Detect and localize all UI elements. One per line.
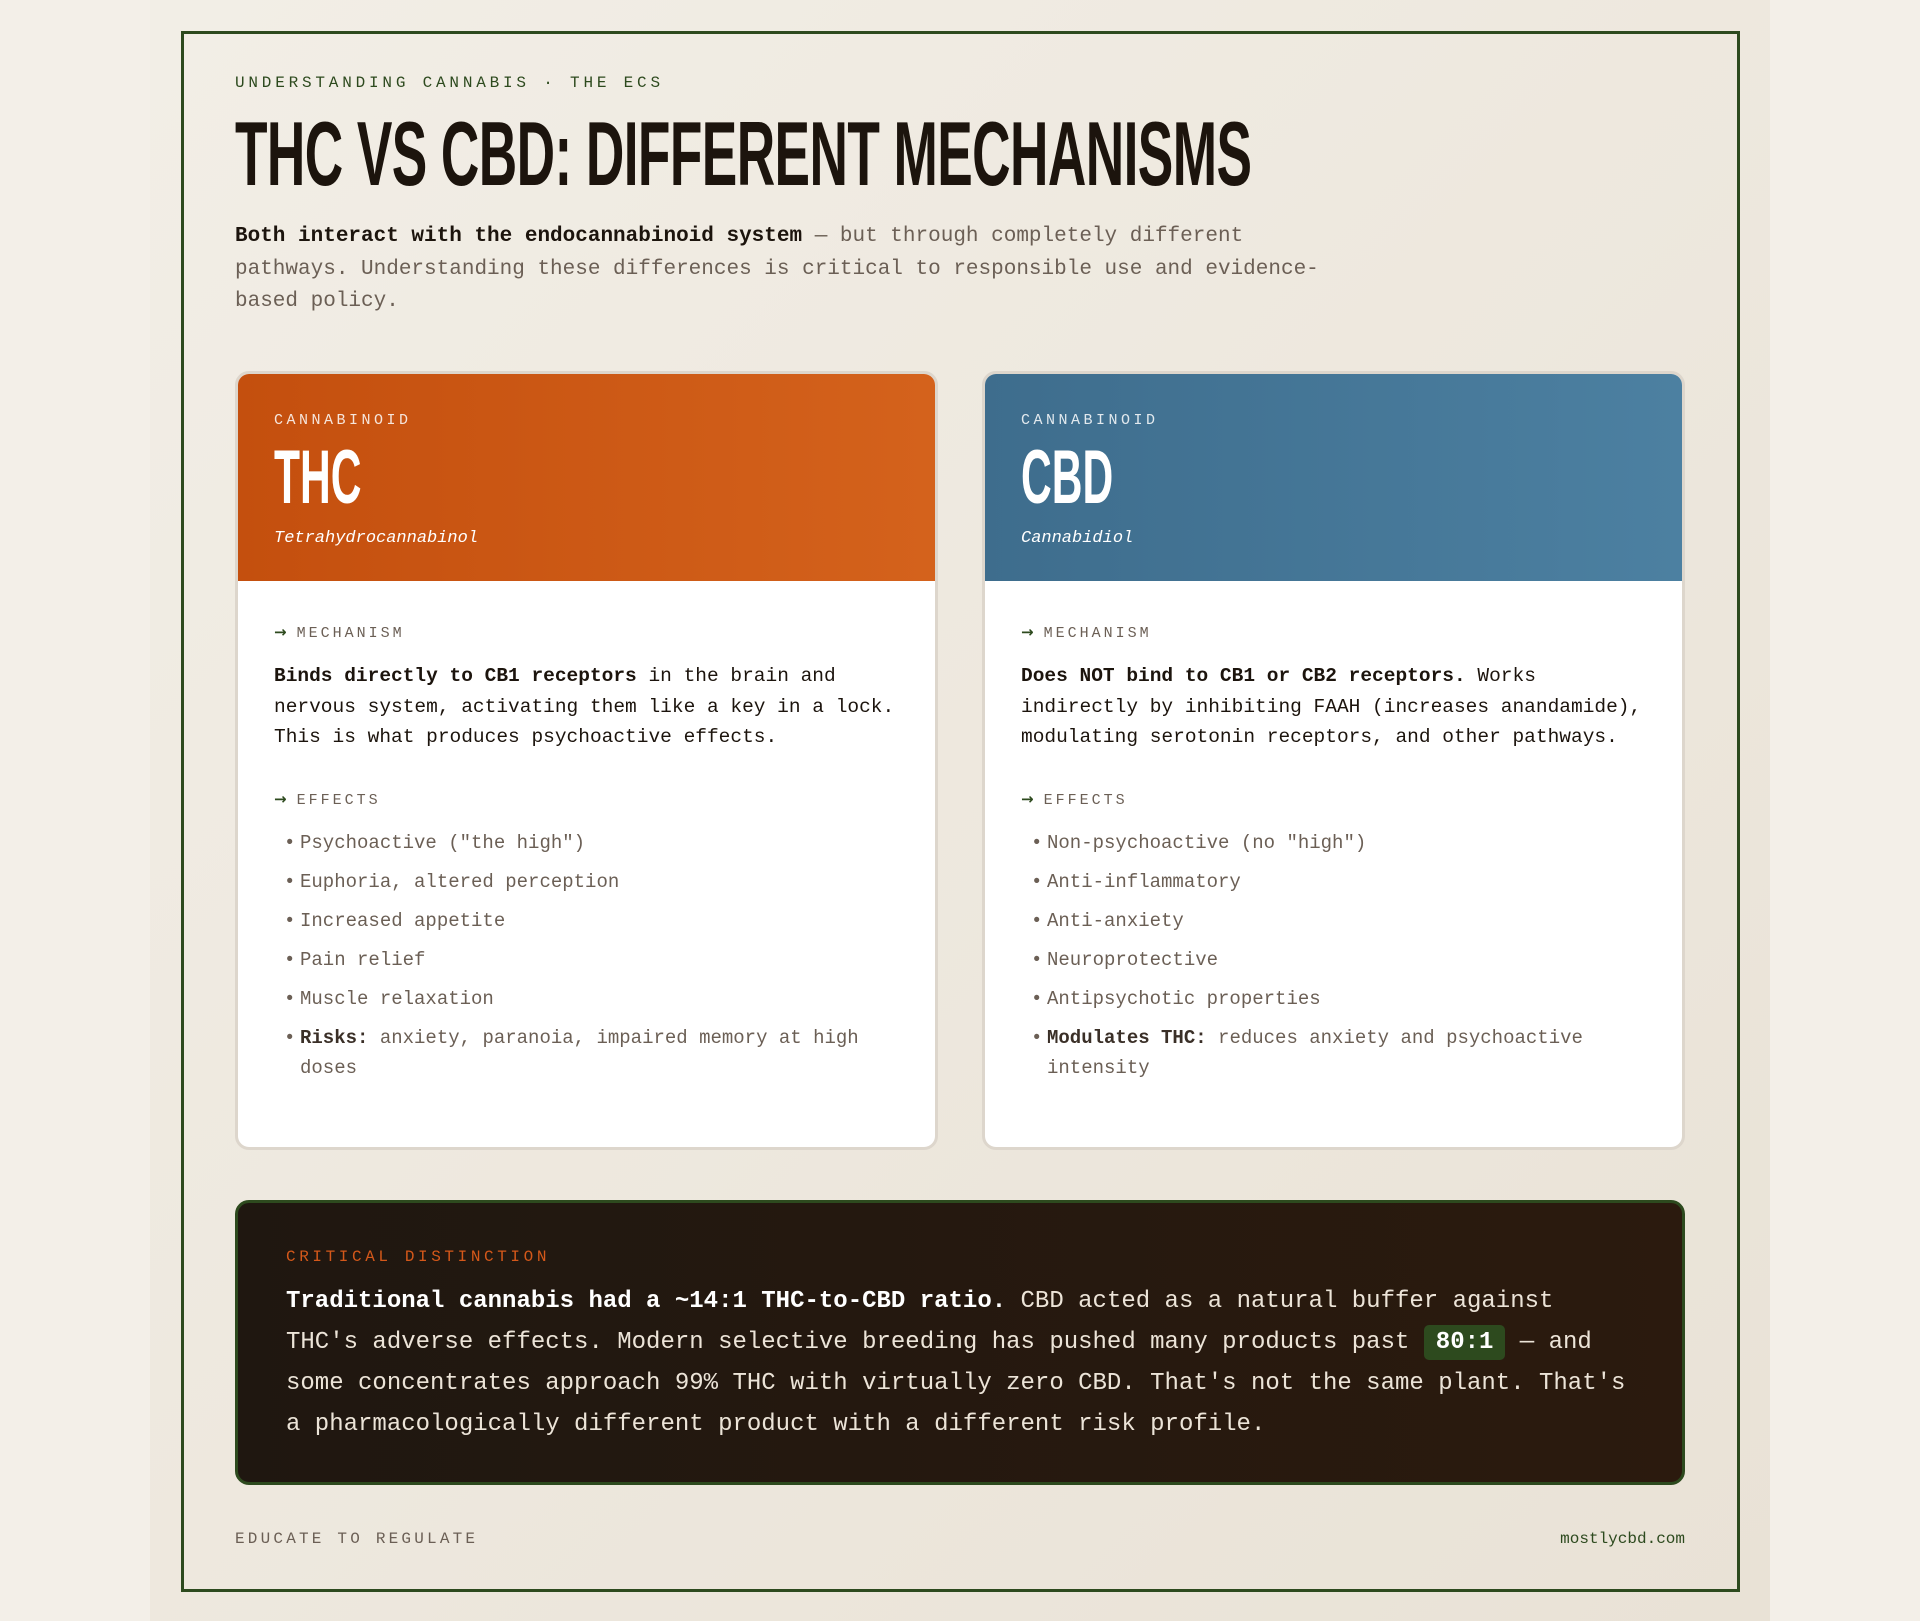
effects list: Anti-inflammatory <box>1047 871 1241 893</box>
effects list <box>1034 832 1583 1079</box>
callout: critical distinction <box>235 1200 1685 1485</box>
effects list: Psychoactive ("the high") <box>300 832 585 854</box>
effects list: Antipsychotic properties <box>1047 988 1321 1010</box>
panel: THC <box>235 371 938 1150</box>
effects label: → EFFECTS <box>1021 790 1128 809</box>
effects list: Increased appetite <box>300 910 505 932</box>
effects list: Neuroprotective <box>1047 949 1218 971</box>
intro text: Both interact with the endocannabinoid system — but through completely different pathways. Understanding these differences is critical to responsible use and evidence-based policy. <box>235 225 1319 313</box>
eyebrow: UNDERSTANDING CANNABIS · THE ECS <box>235 74 664 92</box>
THC header: Tetrahydrocannabinol <box>274 529 478 548</box>
THC header <box>238 374 935 581</box>
THC header: THC <box>274 435 361 520</box>
effects list: Anti-anxiety <box>1047 910 1184 932</box>
mechanism text: Does NOT bind to CB1 or CB2 receptors. Works indirectly by inhibiting FAAH (increases anandamide), modulating serotonin receptors, and other pathways. <box>1021 665 1641 748</box>
CBD header <box>985 374 1682 581</box>
panel: CBD <box>982 371 1685 1150</box>
effects list: Risks: anxiety, paranoia, impaired memory at high doses <box>300 1027 859 1079</box>
title: THC VS CBD: DIFFERENT MECHANISMS <box>235 104 1251 205</box>
footer right: mostlycbd.com <box>1560 1530 1685 1548</box>
effects list: Pain relief <box>300 949 425 971</box>
effects list: Non-psychoactive (no "high") <box>1047 832 1366 854</box>
effects list: Muscle relaxation <box>300 988 494 1010</box>
footer left: EDUCATE TO REGULATE <box>235 1530 478 1548</box>
mechanism label: → MECHANISM <box>1021 623 1152 642</box>
callout: critical distinction: Traditional cannabis had a ~14:1 THC-to-CBD ratio. CBD acted as a natural buffer against THC's adverse effects. Modern selective breeding has pushed many products past 80:1 — and some concentrates approach 99% THC with virtually zero CBD. That's not the same plant. That's a pharmacologically different product with a different risk profile. <box>286 1288 1625 1438</box>
THC header: CANNABINOID <box>274 412 412 429</box>
effects list: Modulates THC: reduces anxiety and psychoactive intensity <box>1047 1027 1583 1079</box>
mechanism text: Binds directly to CB1 receptors in the brain and nervous system, activating them like a key in a lock. This is what produces psychoactive effects. <box>274 665 894 748</box>
CBD header: Cannabidiol <box>1021 529 1133 548</box>
effects list: Euphoria, altered perception <box>300 871 619 893</box>
mechanism label: → MECHANISM <box>274 623 405 642</box>
callout: critical distinction: CRITICAL DISTINCTION <box>286 1248 550 1266</box>
CBD header: CANNABINOID <box>1021 412 1159 429</box>
effects label: → EFFECTS <box>274 790 381 809</box>
CBD header: CBD <box>1021 435 1113 520</box>
effects list <box>287 832 859 1079</box>
